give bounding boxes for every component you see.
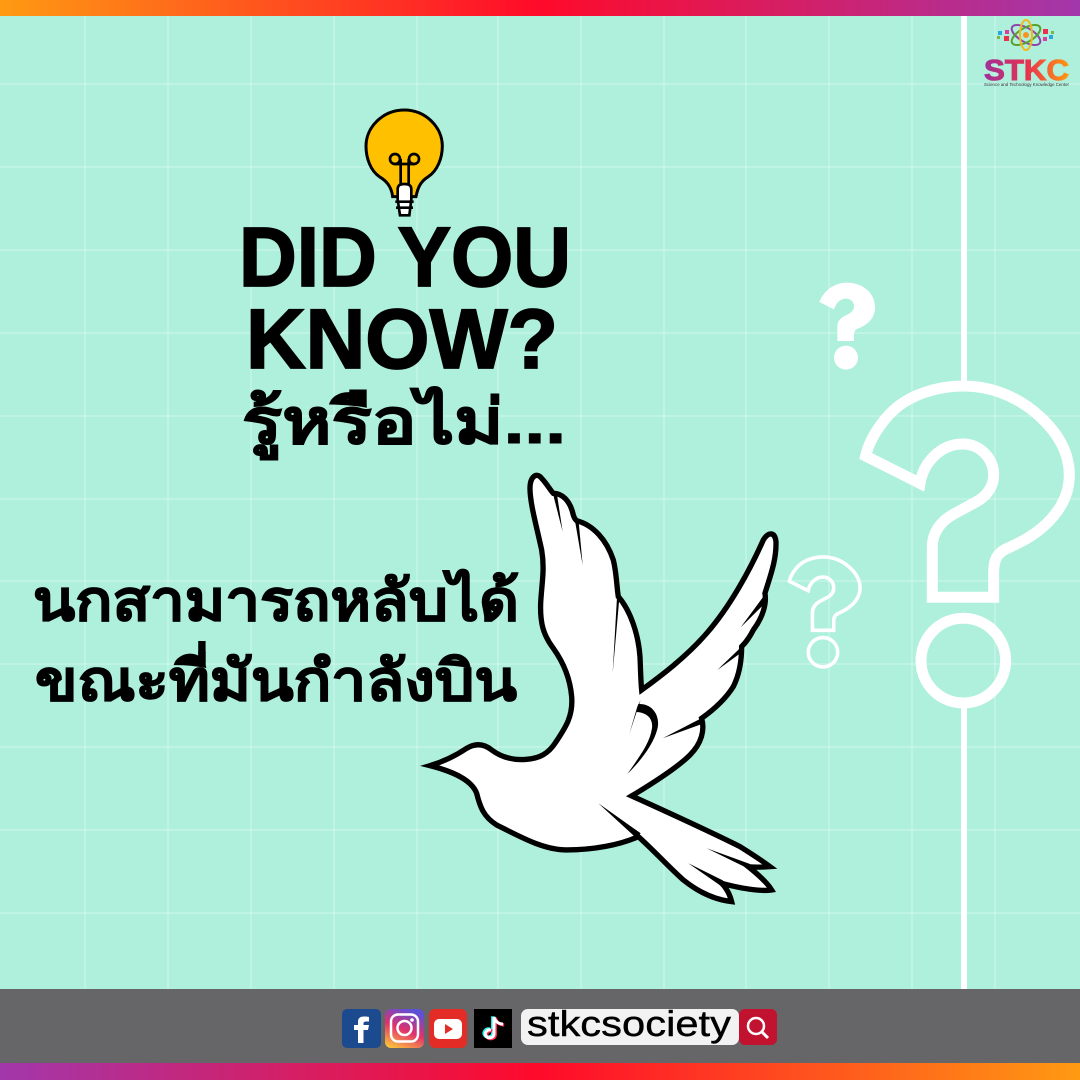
bottom gradient bar xyxy=(0,1063,1080,1080)
icon: facebook xyxy=(342,1009,381,1048)
heading: did you know: DID YOU xyxy=(239,210,571,304)
illustration: white dove xyxy=(430,475,776,902)
vertical white line xyxy=(961,16,967,989)
logo: STKC: Science and Technology Knowledge Center xyxy=(984,82,1069,87)
icon: light bulb xyxy=(366,110,442,215)
body text: thai fact: ขณะที่มันกำลังบิน xyxy=(35,641,517,712)
body text: thai fact xyxy=(33,568,519,712)
large outlined question mark xyxy=(866,386,1069,703)
icon: youtube xyxy=(429,1009,467,1048)
search bar with handle: stkcsociety xyxy=(527,1003,731,1044)
body text: thai fact: นกสามารถหลับได้ xyxy=(33,568,519,632)
footer band xyxy=(0,989,1080,1063)
small solid question mark xyxy=(819,283,875,370)
small outlined question mark xyxy=(789,557,860,667)
icon: search button xyxy=(739,1009,777,1045)
heading: thai subtitle: รู้หรือไม่... xyxy=(242,386,566,460)
logo: STKC xyxy=(984,20,1069,87)
icon: instagram xyxy=(385,1009,424,1048)
logo: STKC: STKC xyxy=(984,55,1069,87)
icon: tiktok xyxy=(474,1009,512,1048)
heading: did you know: KNOW? xyxy=(246,292,558,386)
heading: did you know xyxy=(239,210,571,386)
top gradient bar xyxy=(0,0,1080,16)
